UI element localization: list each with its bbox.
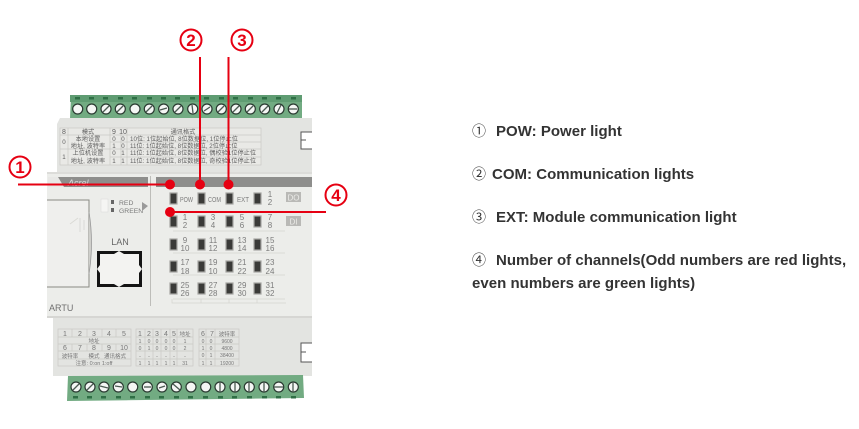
LED indicator grid: 1	[268, 190, 273, 199]
DIP switch table: ..	[156, 353, 158, 359]
DIP switch table: 1	[148, 346, 151, 352]
LAN port	[97, 237, 142, 287]
LED indicator grid: 21	[238, 258, 247, 267]
DIP switch table: 波特率	[219, 330, 236, 338]
marker 3	[232, 30, 252, 50]
DIP switch table: 1	[173, 361, 176, 367]
communication format table: 0	[62, 139, 66, 146]
DIP switch table: 4	[164, 331, 168, 338]
communication format table: 地址, 波特率	[71, 157, 105, 165]
LAN port: LAN	[111, 237, 129, 247]
grey header bars	[48, 177, 148, 187]
LED indicator grid: 6	[240, 221, 245, 230]
legend item 1: POW: Power light	[496, 123, 622, 140]
marker 1	[10, 156, 30, 178]
DIP switch table: 6	[201, 331, 205, 338]
communication format table: 模式	[82, 128, 94, 136]
communication format table: 8	[62, 129, 66, 136]
DIP switch table: 波特率	[62, 352, 79, 360]
LED indicator grid: 19	[209, 258, 218, 267]
DIP switch table: 注意: 0:on 1:off	[76, 359, 113, 367]
red green legend	[101, 199, 148, 215]
LED indicator grid: 10	[181, 244, 190, 253]
communication format table: 1	[121, 150, 125, 157]
LED indicator grid: 11	[209, 236, 218, 245]
communication format table: 11位: 1位起始位, 8位数据位, 偶校验1位停止位	[130, 149, 256, 157]
marker 3: 3	[237, 31, 247, 50]
DIP switch table: 1	[63, 331, 67, 338]
DIP switch table: 10	[120, 345, 128, 352]
DIP switch table: 5	[172, 331, 176, 338]
front panel	[47, 172, 312, 318]
DIP switch table: ..	[165, 353, 167, 359]
LED indicator grid: 2	[183, 221, 188, 230]
LED indicator grid: 24	[266, 267, 275, 276]
DIP switch table: 0	[173, 339, 176, 345]
LED indicator grid: 22	[238, 267, 247, 276]
DIP switch table: 1	[210, 361, 213, 367]
DIP switch table: 8	[92, 345, 96, 352]
DIP switch table: 地址	[88, 337, 100, 345]
DIP switch table: 1	[138, 331, 142, 338]
LED indicator grid: 10	[209, 267, 218, 276]
legend item 3: EXT: Module communication light	[496, 209, 737, 226]
red green legend: RED	[119, 200, 133, 207]
callout 2 line	[196, 57, 204, 189]
red green legend: GREEN	[119, 208, 143, 215]
communication format table: 本地设置	[76, 135, 100, 143]
brand: Acrel	[67, 178, 90, 188]
DIP switch table: 0	[156, 339, 159, 345]
legend item 1: ①	[472, 121, 486, 141]
DIP switch table: 0	[165, 339, 168, 345]
communication format table: 11位: 1位起始位, 8位数据位, 2位停止位	[130, 142, 238, 150]
communication format table: 1	[121, 158, 125, 165]
callout 1 line	[18, 180, 174, 189]
LED indicator grid: 16	[266, 244, 275, 253]
marker 4: 4	[331, 186, 341, 205]
DIP switch table: 5	[122, 331, 126, 338]
DIP switch table: 2	[78, 331, 82, 338]
legend item 4: ④	[472, 250, 486, 270]
DIP switch table: 0	[148, 339, 151, 345]
marker 2	[180, 30, 202, 50]
communication format table: 地址, 波特率	[71, 142, 105, 150]
bottom terminal block	[67, 375, 304, 401]
communication format table: 0	[121, 143, 125, 150]
LED indicator grid: 28	[209, 289, 218, 298]
communication format table	[60, 128, 261, 165]
DIP switch table: 3	[155, 331, 159, 338]
communication format table: 通讯格式	[171, 128, 195, 136]
LED indicator grid: 29	[238, 281, 247, 290]
DIP switch table: 0	[173, 346, 176, 352]
LED indicator grid: 4	[211, 221, 216, 230]
DIP switch table: 1	[184, 339, 187, 345]
LED indicator grid: 23	[266, 258, 275, 267]
DIP switch table: 1	[210, 353, 213, 359]
upper body	[57, 118, 312, 172]
DIP switch table: 9	[107, 345, 111, 352]
communication format table: 11位: 1位起始位, 8位数据位, 奇校验1位停止位	[130, 157, 256, 165]
LED indicator grid: POW	[180, 195, 194, 204]
DIP switch table: 6	[63, 345, 67, 352]
DIP switch table: ..	[148, 353, 150, 359]
marker 4	[326, 184, 346, 206]
DIP switch table: 通讯格式	[104, 352, 126, 360]
legend item 4	[472, 250, 846, 292]
communication format table: 1	[62, 154, 66, 161]
communication format table: 1	[112, 143, 116, 150]
DIP switch table: 2	[184, 346, 187, 352]
legend item 4: Number of channels(Odd numbers are red lights,	[496, 252, 846, 269]
DIP switch table: 19200	[220, 361, 234, 367]
DIP switch table: 1	[156, 361, 159, 367]
LED indicator grid: 32	[266, 289, 275, 298]
DIP switch table: 0	[210, 339, 213, 345]
legend item 4: even numbers are green lights)	[472, 275, 695, 292]
top terminal block	[70, 95, 302, 118]
LED indicator grid: 13	[238, 236, 247, 245]
communication format table: 10	[119, 129, 127, 136]
communication format table: 0	[112, 150, 116, 157]
communication format table: 10位: 1位起始位, 8位数据位, 1位停止位	[130, 135, 238, 143]
LED indicator grid: 7	[268, 213, 273, 222]
LED indicator grid: 3	[211, 213, 216, 222]
DIP switch table: 0	[165, 346, 168, 352]
LED indicator grid: 26	[181, 289, 190, 298]
LED indicator grid: 27	[209, 281, 218, 290]
LED indicator grid: 25	[181, 281, 190, 290]
legend item 3: ③	[472, 207, 486, 227]
communication format table: 0	[121, 136, 125, 143]
LED indicator grid: 9	[183, 236, 188, 245]
LED indicator grid: 15	[266, 236, 275, 245]
LED indicator grid: 30	[238, 289, 247, 298]
DIN clip notch top	[301, 132, 312, 149]
DIP switch table: 2	[147, 331, 151, 338]
DIP switch table: ..	[184, 353, 186, 359]
lower body	[53, 318, 312, 376]
DIP switch table: ..	[139, 353, 141, 359]
callout 3 line	[224, 57, 233, 189]
legend item 2: ②	[472, 164, 486, 184]
LED indicator grid: 5	[240, 213, 245, 222]
DIP switch table: 31	[182, 361, 188, 367]
DIP switch table: 4	[107, 331, 111, 338]
DIP switch table: 1	[202, 346, 205, 352]
DIP switch table: 38400	[220, 353, 234, 359]
DIP switch table: 0	[139, 346, 142, 352]
communication format table: 上位机设置	[73, 149, 103, 157]
DIP switch table: 0	[210, 346, 213, 352]
DIP switch table: 0	[202, 339, 205, 345]
LED indicator grid: EXT	[237, 195, 249, 204]
DIP switch table: 1	[165, 361, 168, 367]
DIP switch table: 1	[139, 361, 142, 367]
marker 2: 2	[186, 31, 196, 50]
communication format table: 0	[112, 136, 116, 143]
DIP switch table: 0	[202, 353, 205, 359]
DIP switch table: 地址	[179, 330, 191, 338]
LED indicator grid: DO	[288, 194, 300, 202]
DIP switch table: 0	[156, 346, 159, 352]
LED indicator grid: 18	[181, 267, 190, 276]
legend item 2: COM: Communication lights	[492, 166, 694, 183]
LED indicator grid: 8	[268, 221, 273, 230]
DIP switch table: 7	[78, 345, 82, 352]
DIP switch table: 1	[202, 361, 205, 367]
model label: ARTU	[49, 303, 73, 313]
LED indicator grid: DI	[290, 218, 298, 226]
LED indicator grid: 12	[209, 244, 218, 253]
DIN clip notch bottom	[301, 343, 312, 362]
LED indicator grid: 31	[266, 281, 275, 290]
DIP switch table	[58, 329, 239, 367]
LED indicator grid: 2	[268, 198, 273, 207]
DIP switch table: 9600	[221, 339, 233, 345]
card cover	[47, 200, 92, 287]
marker 1: 1	[15, 158, 25, 177]
DIP switch table: ..	[173, 353, 175, 359]
callout 4 line	[166, 208, 326, 216]
communication format table: 9	[112, 129, 116, 136]
LED indicator grid: COM	[208, 195, 221, 204]
LED indicator grid	[170, 190, 301, 303]
LED indicator grid: 17	[181, 258, 190, 267]
DIP switch table: 1	[139, 339, 142, 345]
DIP switch table: 模式	[88, 352, 100, 360]
LED indicator grid: 1	[183, 213, 188, 222]
LED indicator grid: 14	[238, 244, 247, 253]
DIP switch table: 7	[210, 331, 214, 338]
communication format table: 1	[112, 158, 116, 165]
DIP switch table: 3	[92, 331, 96, 338]
DIP switch table: 1	[148, 361, 151, 367]
DIP switch table: 4800	[221, 346, 233, 352]
